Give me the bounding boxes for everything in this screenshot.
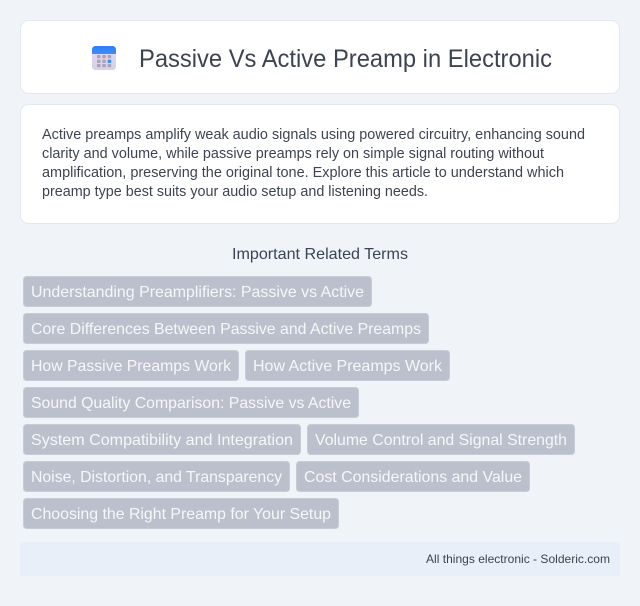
text block: intro paragraph: Active preamps amplify weak audio signals using powered circuitry, enhancing sound xyxy=(42,127,585,143)
text block: intro paragraph: preamp type best suits your audio setup and listening needs. xyxy=(42,184,428,200)
panel: intro description xyxy=(20,104,620,224)
icon: calendar xyxy=(92,46,116,70)
tag: how active preamps work: How Active Preamps Work xyxy=(253,358,443,375)
tag: core differences: Core Differences Between Passive and Active Preamps xyxy=(31,321,421,338)
tag: system compatibility xyxy=(24,424,300,454)
tag: volume control: Volume Control and Signal Strength xyxy=(315,432,567,449)
tag: how active preamps work xyxy=(246,350,450,380)
tag: choosing the right preamp: Choosing the Right Preamp for Your Setup xyxy=(31,506,331,523)
tag: how passive preamps work: How Passive Preamps Work xyxy=(31,358,232,375)
heading: related terms: Important Related Terms xyxy=(232,246,408,263)
tag: noise distortion: Noise, Distortion, and Transparency xyxy=(31,469,282,486)
tag: core differences xyxy=(24,314,428,344)
tag: how passive preamps work xyxy=(24,350,238,380)
tag: understanding preamplifiers: Understanding Preamplifiers: Passive vs Active xyxy=(31,284,364,301)
tag: noise distortion xyxy=(24,462,290,492)
footer credit: All things electronic - Solderic.com xyxy=(426,552,610,566)
title: Passive Vs Active Preamp in Electronic xyxy=(139,45,552,73)
tag: sound quality comparison: Sound Quality Comparison: Passive vs Active xyxy=(31,395,351,412)
tag: volume control xyxy=(308,424,574,454)
tag: system compatibility: System Compatibility and Integration xyxy=(31,432,293,449)
tag: choosing the right preamp xyxy=(24,498,338,528)
panel: title header xyxy=(20,20,620,94)
text block: intro paragraph: amplification, preserving the original tone. Explore this article to understand which xyxy=(42,165,564,181)
text block: intro paragraph xyxy=(42,127,585,200)
tag list: related terms xyxy=(24,276,574,528)
tag: cost considerations: Cost Considerations and Value xyxy=(304,469,522,486)
text block: intro paragraph: clarity and volume, while passive preamps rely on simple signal routing without xyxy=(42,146,544,162)
tag: cost considerations xyxy=(296,462,530,492)
tag: sound quality comparison xyxy=(24,388,358,418)
footer xyxy=(20,542,620,576)
tag: understanding preamplifiers xyxy=(24,276,372,306)
